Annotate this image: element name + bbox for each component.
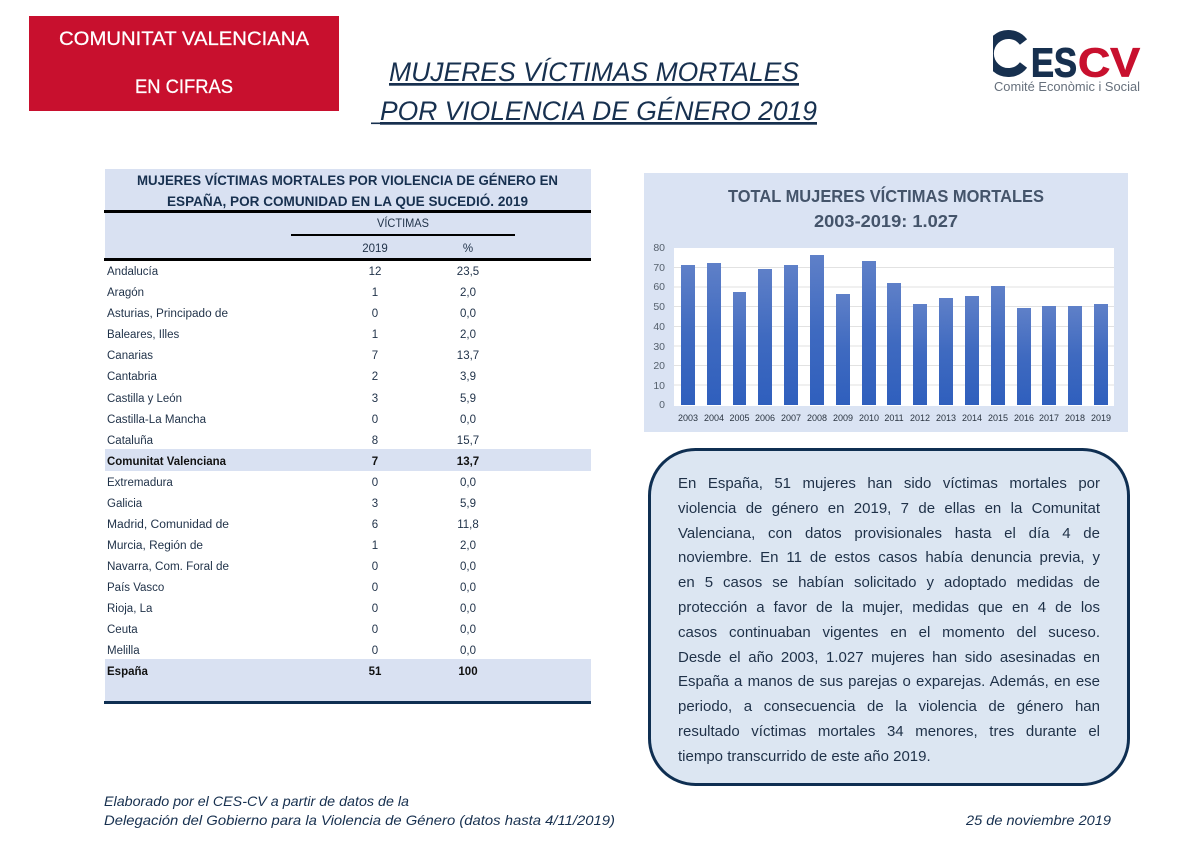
region names: Murcia, Región de (107, 540, 203, 552)
x axis labels: 2006 (755, 413, 775, 423)
x axis labels: 2014 (962, 413, 982, 423)
column: percentage: 0,0 (460, 582, 476, 594)
bars (681, 255, 1108, 405)
column: victims 2019: 0 (372, 603, 378, 615)
x axis labels: 2012 (910, 413, 930, 423)
region names: Navarra, Com. Foral de (107, 561, 229, 573)
column: percentage (457, 266, 479, 678)
column: percentage: 0,0 (460, 645, 476, 657)
x axis labels: 2016 (1014, 413, 1034, 423)
column: percentage: 0,0 (460, 414, 476, 426)
region names: Rioja, La (107, 603, 153, 615)
callout text: periodo, a consecuencia de la violencia de género han (678, 698, 1100, 715)
column: victims 2019: 0 (372, 308, 378, 320)
title: POR VIOLENCIA DE GÉNERO 2019 (380, 96, 817, 126)
column: victims 2019: 8 (372, 435, 378, 447)
logo: CES-CV (989, 35, 1141, 94)
column: victims 2019: 3 (372, 393, 378, 405)
column: victims 2019: 0 (372, 477, 378, 489)
date: 25 de noviembre 2019 (965, 812, 1111, 828)
y axis labels: 70 (653, 262, 665, 274)
y axis labels: 0 (659, 399, 665, 411)
region names: España (107, 666, 149, 678)
title (371, 57, 817, 126)
column: victims 2019: 0 (372, 561, 378, 573)
column: percentage: 13,7 (457, 350, 479, 362)
table header: MUJERES VÍCTIMAS MORTALES POR VIOLENCIA DE GÉNERO EN (137, 173, 558, 188)
table header: 2019 (362, 243, 388, 255)
chart title (728, 185, 1044, 231)
logo: CES-CV: CV (1078, 40, 1141, 86)
badge: Comunitat Valenciana en cifras: COMUNITAT VALENCIANA (59, 28, 309, 50)
x axis labels: 2018 (1065, 413, 1085, 423)
region names: Ceuta (107, 624, 138, 636)
region names (107, 266, 229, 678)
column: victims 2019: 7 (372, 456, 378, 468)
column: victims 2019: 0 (372, 414, 378, 426)
region names: Castilla-La Mancha (107, 414, 207, 426)
callout text: protección a favor de la mujer, medidas que en 4 de los (678, 599, 1100, 616)
column: victims 2019: 7 (372, 350, 378, 362)
callout text: noviembre. En 11 de estos casos había denuncia previa, y (678, 549, 1100, 566)
column: victims 2019 (369, 266, 382, 678)
logo: CES-CV: ES (1031, 40, 1077, 86)
callout text: tiempo transcurrido de este año 2019. (678, 748, 931, 765)
column: percentage: 2,0 (460, 329, 476, 341)
column: percentage: 5,9 (460, 498, 476, 510)
column: percentage: 15,7 (457, 435, 479, 447)
x axis labels: 2004 (704, 413, 724, 423)
column: victims 2019: 1 (372, 540, 378, 552)
source note (104, 793, 615, 828)
source note: Delegación del Gobierno para la Violencia de Género (datos hasta 4/11/2019) (104, 812, 615, 828)
callout text: Valenciana, con datos provisionales hasta el día 4 de (678, 525, 1100, 542)
column: victims 2019: 3 (372, 498, 378, 510)
callout text: resultado víctimas mortales 34 menores, tres durante el (678, 723, 1100, 740)
x axis labels: 2007 (781, 413, 801, 423)
callout text: violencia de género en 2019, 7 de ellas en la Comunitat (678, 500, 1100, 517)
y axis labels: 40 (653, 321, 665, 333)
column: victims 2019: 0 (372, 645, 378, 657)
total row band (105, 659, 591, 702)
panel: bar chart total victims (644, 173, 1128, 432)
y axis labels (653, 242, 665, 411)
y axis labels: 80 (653, 242, 665, 254)
x axis labels: 2003 (678, 413, 698, 423)
source note: Elaborado por el CES-CV a partir de datos de la (104, 793, 409, 809)
y axis labels: 10 (653, 380, 665, 392)
table header (104, 169, 591, 261)
column: percentage: 0,0 (460, 308, 476, 320)
callout text: en 5 casos se habían solicitado y adoptado medidas de (678, 574, 1100, 591)
region names: Galicia (107, 498, 143, 510)
table header: ESPAÑA, POR COMUNIDAD EN LA QUE SUCEDIÓ. 2019 (167, 194, 528, 209)
x axis labels: 2008 (807, 413, 827, 423)
x axis labels: 2011 (884, 413, 904, 423)
table header: % (463, 243, 473, 255)
column: victims 2019: 0 (372, 582, 378, 594)
column: percentage: 13,7 (457, 456, 479, 468)
column: victims 2019: 2 (372, 371, 378, 383)
region names: Andalucía (107, 266, 159, 278)
column: percentage: 0,0 (460, 477, 476, 489)
callout text (678, 475, 1100, 765)
callout text: En España, 51 mujeres han sido víctimas mortales por (678, 475, 1100, 492)
region names: Madrid, Comunidad de (107, 519, 229, 531)
region names: Cataluña (107, 435, 154, 447)
column: percentage: 23,5 (457, 266, 479, 278)
column: percentage: 11,8 (457, 519, 479, 531)
x axis labels: 2013 (936, 413, 956, 423)
x axis labels (678, 413, 1111, 423)
chart title: TOTAL MUJERES VÍCTIMAS MORTALES (728, 185, 1044, 206)
y axis labels: 60 (653, 281, 665, 293)
x axis labels: 2009 (833, 413, 853, 423)
column: percentage: 2,0 (460, 540, 476, 552)
logo: CES-CV: Comité Econòmic i Social (994, 80, 1140, 94)
callout text: España a manos de sus parejas o exparejas. Además, en ese (678, 673, 1100, 690)
chart title: 2003-2019: 1.027 (814, 211, 958, 231)
column: percentage: 0,0 (460, 624, 476, 636)
column: victims 2019: 51 (369, 666, 382, 678)
region names: Castilla y León (107, 393, 182, 405)
region names: Cantabria (107, 371, 157, 383)
x axis labels: 2019 (1091, 413, 1111, 423)
column: percentage: 2,0 (460, 287, 476, 299)
region names: Baleares, Illes (107, 329, 179, 341)
highlighted row band (105, 449, 591, 471)
y axis labels: 20 (653, 360, 665, 372)
column: percentage: 100 (458, 666, 478, 678)
region names: País Vasco (107, 582, 164, 594)
badge: Comunitat Valenciana en cifras: EN CIFRAS (135, 76, 233, 98)
column: victims 2019: 1 (372, 287, 378, 299)
x axis labels: 2005 (729, 413, 750, 423)
callout text: Desde el año 2003, 1.027 mujeres han sido asesinadas en (678, 649, 1100, 666)
column: percentage: 0,0 (460, 603, 476, 615)
region names: Asturias, Principado de (107, 308, 228, 320)
title: MUJERES VÍCTIMAS MORTALES (389, 57, 799, 87)
column: victims 2019: 0 (372, 624, 378, 636)
callout text: casos continuaban vigentes en el momento del suceso. (678, 624, 1100, 641)
region names: Canarias (107, 350, 153, 362)
column: victims 2019: 12 (369, 266, 381, 278)
badge: Comunitat Valenciana en cifras (29, 16, 339, 111)
column: victims 2019: 1 (372, 329, 378, 341)
region names: Melilla (107, 645, 140, 657)
region names: Comunitat Valenciana (107, 456, 227, 468)
region names: Aragón (107, 287, 144, 299)
table header: VÍCTIMAS (377, 217, 429, 230)
y axis labels: 50 (653, 301, 665, 313)
x axis labels: 2017 (1039, 413, 1059, 423)
region names: Extremadura (107, 477, 173, 489)
panel: table of victims by region (104, 169, 591, 704)
y axis labels: 30 (653, 341, 665, 353)
x axis labels: 2015 (988, 413, 1008, 423)
x axis labels: 2010 (859, 413, 879, 423)
column: victims 2019: 6 (372, 519, 378, 531)
column: percentage: 3,9 (460, 371, 476, 383)
column: percentage: 5,9 (460, 393, 476, 405)
column: percentage: 0,0 (460, 561, 476, 573)
callout box background (650, 450, 1128, 784)
